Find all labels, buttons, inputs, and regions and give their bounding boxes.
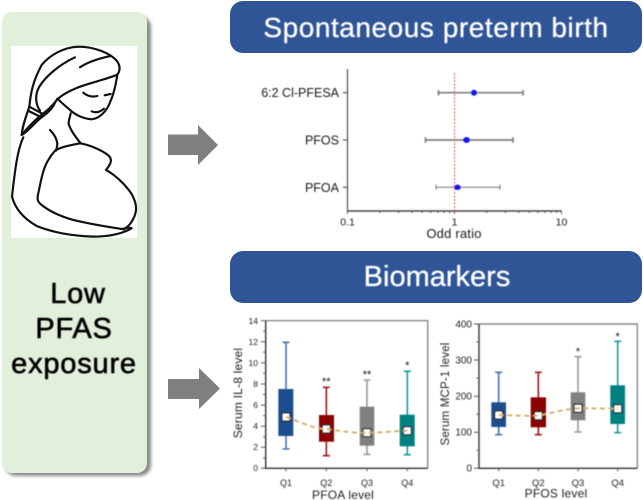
x ticks: [280, 478, 413, 488]
x ticks: Q4: [401, 478, 413, 488]
x ticks: Q3: [572, 478, 584, 489]
row: PFOA: [305, 181, 500, 195]
text: low PFAS exposure: Low: [50, 278, 106, 310]
box Q2: [531, 372, 546, 435]
axes: [261, 321, 428, 471]
y ticks: [249, 316, 258, 473]
heading: spontaneous preterm birth: Spontaneous preterm birth: [263, 12, 609, 43]
y ticks: 10: [249, 358, 258, 368]
significance stars: *: [616, 331, 621, 343]
trend line: [286, 417, 407, 433]
significance stars: **: [363, 369, 372, 381]
axes: [474, 324, 637, 471]
reference line at 1: [454, 73, 456, 211]
text: low PFAS exposure: PFAS: [35, 313, 113, 345]
x axis title: Odd ratio: [426, 226, 482, 241]
y ticks: 300: [455, 356, 472, 366]
row: 6:2 Cl-PFESA: [261, 86, 523, 100]
x axis labels: 10: [556, 216, 567, 228]
trend line: [499, 408, 618, 416]
axes: [343, 69, 562, 214]
row: 6:2 Cl-PFESA: 6:2 Cl-PFESA: [261, 86, 340, 100]
box Q3: [571, 357, 585, 432]
y ticks: 12: [249, 337, 258, 347]
x ticks: Q1: [280, 478, 292, 488]
row: PFOA: PFOA: [305, 181, 340, 195]
y title: Serum IL-8 level: [231, 348, 245, 438]
x ticks: Q2: [320, 478, 332, 488]
significance stars: *: [405, 360, 410, 372]
row: PFOS: PFOS: [305, 134, 339, 148]
y ticks: [455, 320, 472, 474]
x axis labels: 0.1: [340, 216, 355, 228]
y ticks: 6: [253, 400, 258, 410]
y ticks: 2: [253, 442, 258, 452]
box Q1: [491, 372, 506, 435]
row: PFOS: [305, 134, 513, 148]
y ticks: 14: [249, 316, 258, 326]
y ticks: 4: [253, 421, 258, 431]
significance stars: [322, 360, 410, 388]
mean markers: [495, 404, 622, 420]
arrow: to biomarkers: [168, 368, 220, 409]
arrow: to spontaneous preterm birth: [168, 125, 218, 165]
x ticks: Q1: [492, 478, 505, 489]
y title: Serum MCP-1 level: [440, 342, 452, 446]
significance stars: *: [576, 346, 581, 358]
heading: spontaneous preterm birth: [230, 1, 642, 53]
panel: low PFAS exposure: [2, 12, 151, 476]
x ticks: [492, 478, 624, 489]
box Q3: [360, 380, 374, 454]
box Q2: [319, 387, 334, 456]
y ticks: 100: [455, 428, 472, 438]
box Q1: [278, 342, 293, 449]
x axis labels: 1: [452, 216, 458, 228]
significance stars: [576, 331, 621, 358]
chart: serum MCP-1 by PFOS level: [440, 320, 637, 500]
significance stars: **: [322, 376, 331, 388]
box Q4: [610, 341, 625, 433]
icon: pregnant woman: [12, 47, 136, 237]
x axis labels: [340, 216, 567, 228]
heading: biomarkers: [230, 251, 642, 303]
y ticks: 400: [455, 320, 472, 330]
heading: biomarkers: Biomarkers: [364, 261, 510, 293]
mean markers: [282, 413, 411, 437]
text: low PFAS exposure: exposure: [11, 348, 137, 380]
y ticks: 200: [455, 392, 472, 402]
y ticks: 0: [466, 464, 472, 474]
y ticks: 0: [253, 463, 258, 473]
x ticks: Q4: [611, 478, 624, 489]
chart: forest plot of odds ratios: [261, 69, 567, 241]
chart: serum IL-8 by PFOA level: [231, 316, 428, 500]
y ticks: 8: [253, 379, 258, 389]
x ticks: Q3: [361, 478, 373, 488]
x ticks: Q2: [532, 478, 545, 489]
box Q4: [400, 371, 415, 455]
text: low PFAS exposure: [11, 278, 137, 380]
